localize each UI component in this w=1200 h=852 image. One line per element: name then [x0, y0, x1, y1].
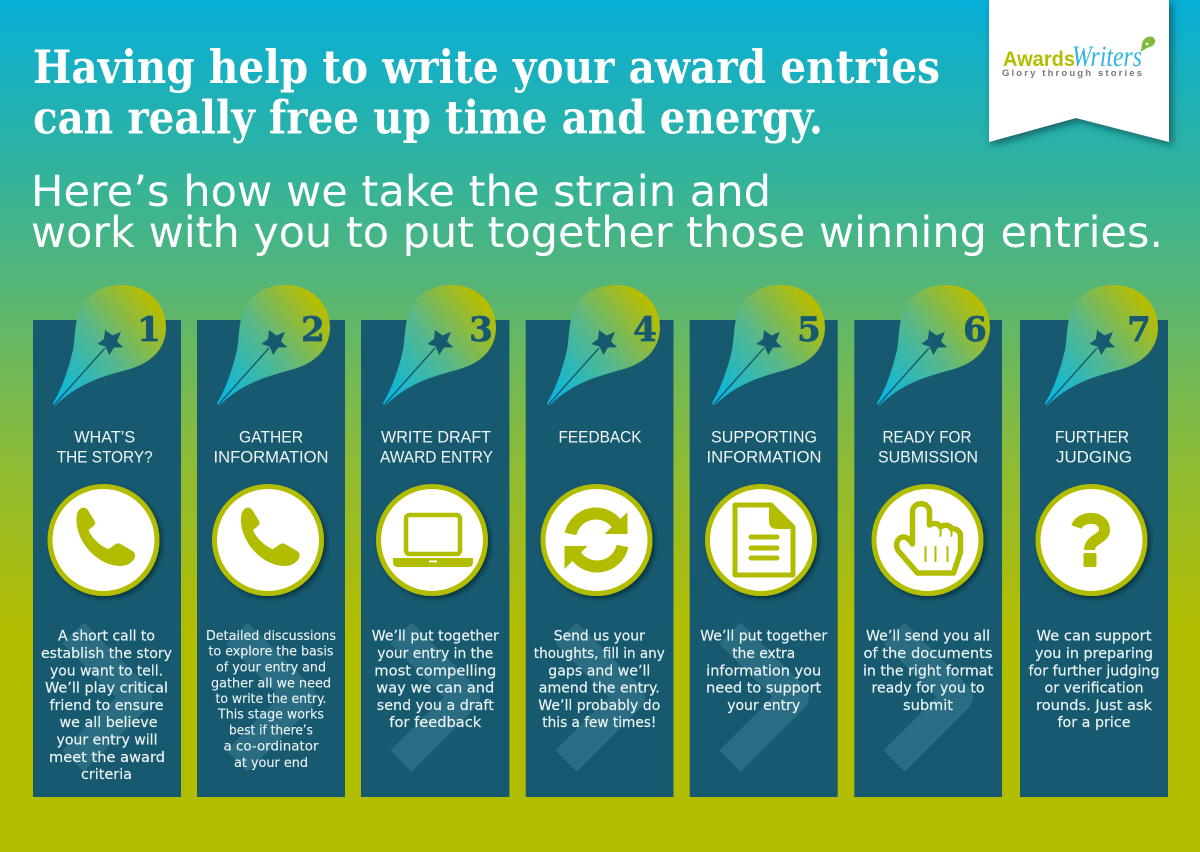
panel 5: supporting information	[690, 285, 838, 797]
description 7: for a price	[1058, 715, 1130, 731]
title: can really free up time and energy.	[33, 90, 823, 144]
pen nib badge 5	[712, 285, 825, 405]
description 4: amend the entry.	[539, 681, 660, 697]
number 4: 4	[633, 310, 657, 350]
subtitle	[31, 168, 1163, 258]
title: Having help to write your award entries	[33, 40, 940, 94]
description 5: your entry	[727, 698, 800, 714]
description 2: a co-ordinator	[224, 740, 319, 754]
icon: question mark	[1038, 486, 1145, 594]
heading 7	[1055, 428, 1132, 466]
description 3: We’ll put together	[372, 629, 499, 645]
heading 2	[214, 428, 328, 466]
heading 5	[706, 428, 822, 466]
description 3: for feedback	[389, 715, 482, 731]
heading 3	[380, 428, 493, 466]
panel 6: ready for submission	[854, 285, 1002, 797]
description 6: We’ll send you all	[866, 629, 990, 645]
description 7: for further judging	[1028, 663, 1160, 679]
heading 6	[878, 428, 978, 466]
pen nib badge 1	[53, 285, 166, 405]
description 1: A short call to	[58, 629, 155, 645]
description 2: This stage works	[217, 708, 324, 723]
description 4	[534, 629, 665, 731]
number 7: 7	[1127, 310, 1151, 350]
icon: phone	[214, 486, 322, 594]
description 7: or verification	[1044, 681, 1144, 697]
description 7: We can support	[1036, 629, 1152, 645]
description 3: most compelling	[374, 663, 496, 679]
title	[33, 40, 940, 144]
heading 2: INFORMATION	[214, 448, 328, 466]
heading 2: GATHER	[239, 428, 303, 446]
description 1: you want to tell.	[50, 663, 163, 679]
heading 7: JUDGING	[1056, 448, 1132, 466]
pen nib badge 2	[217, 285, 330, 405]
heading 1: THE STORY?	[57, 448, 153, 466]
description 6: submit	[903, 698, 953, 714]
heading 1	[57, 428, 153, 466]
number 5: 5	[797, 310, 821, 350]
panel 7: further judging	[1020, 285, 1168, 797]
description 2	[206, 629, 336, 771]
description 7: you in preparing	[1035, 646, 1153, 662]
description 2: gather all we need	[211, 676, 331, 692]
description 4: this a few times!	[542, 715, 656, 731]
pen nib badge 6	[877, 285, 990, 405]
logo banner	[989, 0, 1169, 142]
heading 3: AWARD ENTRY	[380, 448, 493, 466]
description 2: at your end	[234, 756, 308, 771]
logo banner: Glory through stories	[1002, 68, 1142, 79]
heading 5: INFORMATION	[706, 448, 822, 466]
description 5: the extra	[732, 646, 795, 662]
number 2: 2	[301, 310, 325, 350]
heading 6: READY FOR	[882, 428, 972, 446]
icon: laptop	[378, 486, 486, 594]
description 4: thoughts, fill in any	[534, 646, 665, 662]
description 3: way we can and	[376, 681, 494, 697]
subtitle: work with you to put together those winning entries.	[31, 209, 1163, 258]
heading 3: WRITE DRAFT	[381, 428, 491, 446]
pen nib badge 3	[383, 285, 496, 405]
description 1: establish the story	[41, 646, 172, 662]
description 1: We’ll play critical	[45, 681, 168, 697]
panel 2: gather information	[197, 285, 345, 797]
description 1: meet the award	[49, 750, 165, 766]
description 2: best if there’s	[229, 724, 313, 738]
heading 7: FURTHER	[1055, 428, 1129, 446]
description 5	[700, 629, 827, 714]
description 1: we all believe	[60, 715, 158, 731]
icon: document	[708, 486, 814, 594]
heading 4: FEEDBACK	[558, 428, 642, 446]
number 1: 1	[137, 310, 161, 350]
description 3	[372, 629, 499, 731]
icon: pointing hand	[874, 486, 981, 594]
description 7	[1028, 629, 1160, 731]
heading 6: SUBMISSION	[878, 448, 978, 466]
panel 3: write draft award entry	[361, 285, 509, 797]
panel 1: what's the story	[33, 285, 181, 797]
description 1: criteria	[81, 767, 132, 783]
description 6	[863, 629, 993, 714]
description 4: We’ll probably do	[538, 698, 660, 714]
heading 5: SUPPORTING	[711, 428, 817, 446]
number 6: 6	[963, 310, 987, 350]
description 3: your entry in the	[377, 646, 493, 662]
description 3: send you a draft	[377, 698, 494, 714]
icon: refresh arrows	[543, 486, 650, 594]
icon: phone	[50, 486, 157, 594]
description 2: Detailed discussions	[206, 629, 336, 644]
description 4: Send us your	[554, 629, 645, 645]
logo banner: Awards	[1003, 48, 1075, 71]
description 1: friend to ensure	[50, 698, 164, 714]
description 5: information you	[706, 663, 821, 679]
description 6: in the right format	[863, 663, 993, 679]
pen nib badge 4	[547, 285, 660, 405]
heading 1: WHAT’S	[74, 428, 135, 446]
description 2: to write the entry.	[216, 692, 326, 707]
description 2: to explore the basis	[208, 645, 334, 660]
description 4: gaps and we’ll	[548, 663, 650, 679]
panel 4: feedback	[526, 285, 674, 797]
number 3: 3	[469, 310, 493, 350]
description 5: need to support	[706, 681, 822, 697]
description 2: of your entry and	[216, 660, 326, 676]
subtitle: Here’s how we take the strain and	[31, 168, 771, 217]
logo banner: Writers	[1072, 40, 1142, 73]
description 1	[41, 629, 172, 783]
description 5: We’ll put together	[700, 629, 827, 645]
description 1: your entry will	[56, 732, 158, 748]
description 6: of the documents	[864, 646, 992, 662]
description 6: ready for you to	[872, 681, 984, 697]
description 7: rounds. Just ask	[1036, 698, 1153, 714]
pen nib badge 7	[1045, 285, 1158, 405]
